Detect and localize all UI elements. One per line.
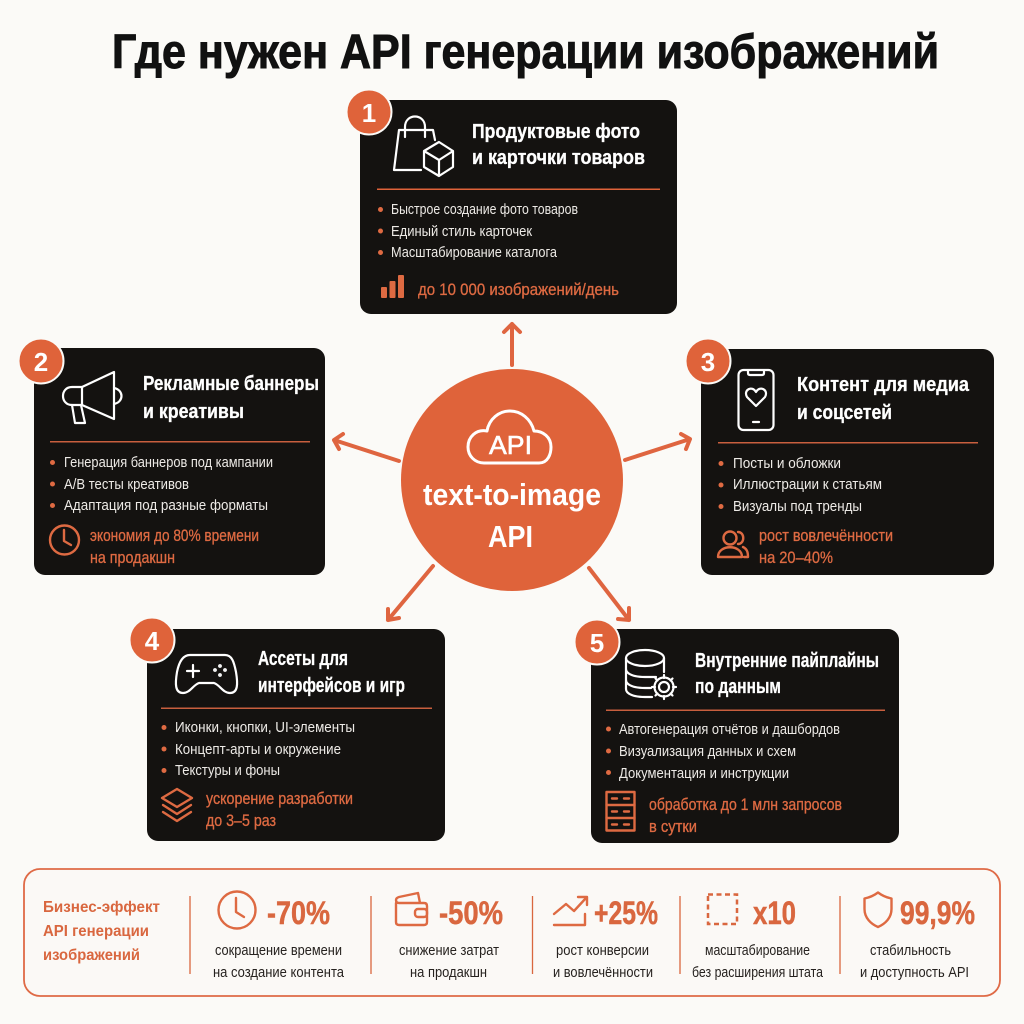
card 4 heading: Ассеты для <box>258 648 348 670</box>
arrow: to card 4 <box>388 566 433 620</box>
icon: API cloud <box>468 411 551 463</box>
card 5 bullet list: Автогенерация отчётов и дашбордов <box>619 722 840 738</box>
hub title line 1: text-to-image <box>423 477 601 512</box>
card 1 heading: Продуктовые фото <box>472 121 640 143</box>
badge 3 <box>686 338 730 384</box>
card 3 heading <box>797 374 970 424</box>
card 4 heading: интерфейсов и игр <box>258 675 405 697</box>
panel: card 4 UI and game assets <box>130 618 445 841</box>
summary heading: API генерации <box>43 923 149 940</box>
icon: database with gear <box>626 650 676 699</box>
icon: wallet <box>396 893 427 925</box>
card 4 metric <box>206 790 353 830</box>
stat: scale: x10 <box>753 895 796 931</box>
card 2 metric <box>90 527 259 567</box>
stat: cost reduction <box>396 893 503 981</box>
stat: time reduction: -70% <box>267 895 330 931</box>
icon: gamepad <box>176 655 237 693</box>
hub title line 2: API <box>488 519 533 554</box>
card 5 heading <box>695 650 879 698</box>
stat: availability: стабильность <box>870 943 951 959</box>
card 2 heading: и креативы <box>143 401 244 423</box>
badge 4: 4 <box>145 626 160 656</box>
card 3 bullet list: Визуалы под тренды <box>733 499 862 515</box>
card 5 bullet list: Документация и инструкции <box>619 766 789 782</box>
card 3 metric: на 20–40% <box>759 549 833 567</box>
panel: card 3 media content <box>686 338 994 575</box>
card 4 bullet list: Иконки, кнопки, UI-элементы <box>175 720 355 736</box>
card 4 metric: до 3–5 раз <box>206 812 276 830</box>
card 1 bullet list: Быстрое создание фото товаров <box>391 202 578 218</box>
icon: growth chart <box>554 897 587 925</box>
card 3 bullet list: Иллюстрации к статьям <box>733 477 882 493</box>
badge 2 <box>18 338 64 384</box>
card 2 metric: на продакшн <box>90 549 175 567</box>
panel: card 5 data pipelines <box>574 620 899 843</box>
summary heading: Бизнес-эффект <box>43 899 160 916</box>
card 2 heading: Рекламные баннеры <box>143 373 319 395</box>
icon: clock <box>50 526 79 554</box>
card 1 metric: до 10 000 изображений/день <box>418 281 619 299</box>
panel: card 1 product photos <box>346 90 677 314</box>
summary heading <box>43 899 160 964</box>
card 5 bullet list: Визуализация данных и схем <box>619 744 796 760</box>
arrow: to card 3 <box>625 434 690 460</box>
stat: conversion growth: и вовлечённости <box>553 965 653 981</box>
stat: conversion growth: рост конверсии <box>556 943 649 959</box>
stat: cost reduction: -50% <box>439 895 503 931</box>
card 4 bullet list: Концепт-арты и окружение <box>175 742 341 758</box>
card 1 bullet list: Единый стиль карточек <box>391 224 533 240</box>
icon: megaphone <box>63 372 122 423</box>
icon: bar chart <box>381 275 404 298</box>
badge 5: 5 <box>590 628 604 658</box>
icon: server rack <box>606 792 634 830</box>
card 5 metric: обработка до 1 млн запросов <box>649 796 842 814</box>
panel: business effect summary <box>24 869 1000 996</box>
arrows from hub to cards <box>334 324 690 620</box>
badge 1 <box>346 90 392 134</box>
panel: card 2 ad banners <box>18 338 325 575</box>
card 1 bullet list: Масштабирование каталога <box>391 245 558 261</box>
card 2 bullet list: A/B тесты креативов <box>64 477 189 493</box>
card 2 bullet list: Адаптация под разные форматы <box>64 498 268 514</box>
card 2 bullet list <box>50 455 273 514</box>
stat: time reduction: на создание контента <box>213 965 345 981</box>
card 1 heading: и карточки товаров <box>472 147 645 169</box>
stat: time reduction <box>213 892 345 981</box>
icon: dashed square <box>708 894 737 924</box>
card 5 metric: в сутки <box>649 818 697 836</box>
card 1 bullet list <box>378 202 578 261</box>
stat: cost reduction: снижение затрат <box>399 943 499 959</box>
card 2 bullet list: Генерация баннеров под кампании <box>64 455 273 471</box>
card 4 bullet list: Текстуры и фоны <box>175 763 280 779</box>
stat: conversion growth: +25% <box>594 895 658 931</box>
stat: availability <box>860 892 975 981</box>
card 1 heading <box>472 121 645 169</box>
card 5 heading: по данным <box>695 676 781 698</box>
icon: people <box>718 532 748 557</box>
badge 3: 3 <box>701 347 715 377</box>
card 3 bullet list <box>718 456 882 515</box>
stat: cost reduction: на продакшн <box>410 965 487 981</box>
stat: availability: 99,9% <box>900 895 975 931</box>
stat: scale: без расширения штата <box>692 965 824 981</box>
stat: time reduction: сокращение времени <box>215 943 342 959</box>
badge 4 <box>130 618 174 662</box>
title: Где нужен API генерации изображений <box>112 26 939 79</box>
card 2 metric: экономия до 80% времени <box>90 527 259 545</box>
card 4 bullet list <box>162 720 355 779</box>
summary heading: изображений <box>43 947 140 964</box>
card 5 metric <box>649 796 842 836</box>
stat: conversion growth <box>553 895 658 981</box>
central hub <box>401 369 623 591</box>
icon: shield <box>864 892 892 927</box>
icon: bag with box <box>394 116 453 176</box>
card 3 bullet list: Посты и обложки <box>733 456 841 472</box>
card 5 bullet list <box>606 722 840 782</box>
stat: scale: масштабирование <box>705 943 810 959</box>
cloud label: API <box>489 430 532 460</box>
card 3 heading: и соцсетей <box>797 402 892 424</box>
badge 5 <box>574 620 620 664</box>
card 3 metric: рост вовлечённости <box>759 527 893 545</box>
icon: layers <box>162 789 192 821</box>
icon: phone with heart <box>738 370 774 430</box>
arrow: to card 1 <box>504 324 520 365</box>
arrow: to card 5 <box>589 568 629 620</box>
card 4 metric: ускорение разработки <box>206 790 353 808</box>
card 2 heading <box>143 373 319 423</box>
card 4 heading <box>258 648 405 697</box>
badge 2: 2 <box>34 347 48 377</box>
card 5 heading: Внутренние пайплайны <box>695 650 879 672</box>
stat: scale <box>692 894 824 981</box>
card 3 metric <box>759 527 893 567</box>
badge 1: 1 <box>362 98 376 128</box>
arrow: to card 2 <box>334 434 399 461</box>
stat: availability: и доступность API <box>860 965 969 981</box>
card 3 heading: Контент для медиа <box>797 374 970 396</box>
icon: clock <box>218 892 256 928</box>
